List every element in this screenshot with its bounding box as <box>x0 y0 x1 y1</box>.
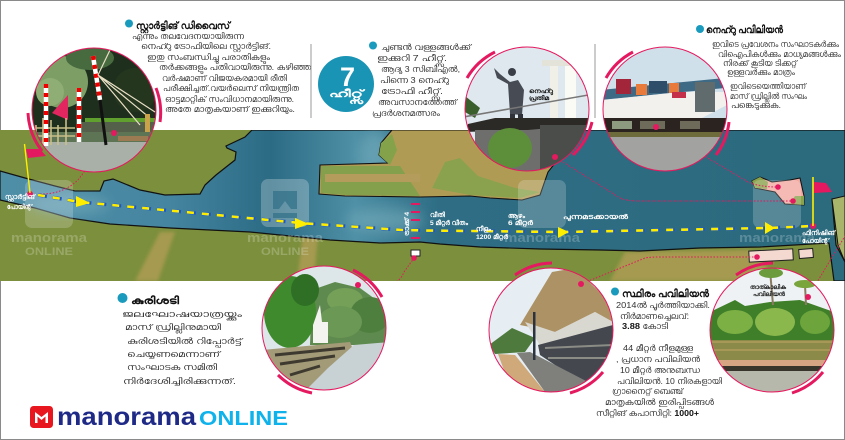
map labels <box>5 193 836 246</box>
text block: starting device: പരീക്ഷിച്ചത്.വയർലെസ് നിയന്ത്രിത <box>163 83 300 93</box>
text block: Nehru pavilion: നിരക്ക് കൂടിയ ടിക്കറ്റ് <box>723 58 798 69</box>
text block: Nehru pavilion <box>696 23 841 111</box>
text block: starting device: അതേ മാതൃകയാണ് ഇക്കുറിയും. <box>165 104 295 115</box>
text block: Kurishadi: കുരിശടി <box>131 294 180 307</box>
watermarks: manorama <box>11 230 88 245</box>
text block: heats <box>369 42 472 118</box>
photo: starting device <box>28 46 161 174</box>
connector dots <box>27 184 816 261</box>
watermarks: ONLINE <box>25 246 73 258</box>
photo: Nehru statue: പ്രതിമ <box>529 95 549 102</box>
text block: starting device: സ്റ്റാർട്ടിങ് ഡിവൈസ് <box>136 19 232 34</box>
text block: heats: അവസാനത്തേത്ത് <box>378 97 458 107</box>
text block: heats: ആദ്യ 3 സിബിഎൽ, <box>381 64 460 75</box>
badge: 7 heats: 7 <box>340 62 355 92</box>
photo: Kurishadi <box>262 266 390 393</box>
text block: permanent pavilion: , പ്രധാന പവിലിയൻ <box>616 354 701 364</box>
logo: manorama online: ONLINE <box>199 408 288 430</box>
text block: permanent pavilion: 10 മീറ്റർ അനുബന്ധ <box>620 365 701 376</box>
map labels: പോയിന്റ് <box>802 237 830 246</box>
text block: Kurishadi <box>118 293 244 386</box>
text block: permanent pavilion: സ്ഥിരം പവിലിയൻ <box>622 287 710 300</box>
watermarks: ONLINE <box>261 246 309 258</box>
text block: permanent pavilion: മാതൃകയിൽ ഇരിപ്പിടങ്ങൾ <box>605 397 716 408</box>
pavilion blocks on the bank <box>411 248 813 262</box>
map labels: സ്റ്റാർട്ടിങ് <box>5 193 36 202</box>
text block: heats: പിന്നെ 3 നെഹ്റു <box>380 75 449 86</box>
race route <box>38 195 813 232</box>
text block: permanent pavilion: ഗ്രാനൈറ്റ് ബെഞ്ച് <box>612 386 684 397</box>
badge: 7 heats <box>318 56 374 112</box>
watermarks <box>11 179 816 258</box>
map labels: 6 മീറ്റർ <box>508 219 534 228</box>
text block: permanent pavilion: 44 മീറ്റർ നീളമുള്ള <box>623 343 694 354</box>
badge: 7 heats: ഹീറ്റ്സ് <box>329 87 366 104</box>
text block: starting device: നെഹ്റു ട്രോഫിയിലെ സ്റ്റാർട്ടിങ്. <box>141 41 271 53</box>
text block: Nehru pavilion: പങ്കെടുക്കുക. <box>731 100 781 111</box>
finish flag <box>813 177 832 226</box>
text block: permanent pavilion: 3.88 കോടി <box>622 321 668 331</box>
text block: Kurishadi: കുരിശടിയിൽ റിപ്പോർട്ട് <box>127 336 244 347</box>
route arrows <box>76 196 775 238</box>
map labels: ട്രാക്ക് 4 <box>404 212 411 236</box>
text block: Nehru pavilion: വിഐപികൾക്കും മാധ്യമങ്ങൾക്കും <box>718 49 841 60</box>
text block: Kurishadi: ചെയ്യണമെന്നാണ് <box>127 349 222 359</box>
start flag <box>24 144 46 193</box>
dividers <box>311 44 595 118</box>
photo: permanent pavilion <box>489 263 613 395</box>
logo: manorama online <box>30 403 288 431</box>
river <box>0 130 845 281</box>
text block: permanent pavilion: പവിലിയൻ. 10 നിരകളായി <box>617 376 722 386</box>
photo: Nehru pavilion <box>600 47 730 173</box>
map labels: വീതി <box>430 211 446 219</box>
text block: heats: ഇക്കുറി 7 ഹീറ്റ്സ്. <box>377 53 447 66</box>
text block: starting device: തർക്കങ്ങളും പതിവായിരുന്നു. കഴിഞ്ഞ <box>159 62 313 74</box>
map labels: പോയിന്റ് <box>7 203 33 212</box>
photo: temporary pavilion: പവിലിയൻ <box>753 291 786 298</box>
text block: Nehru pavilion: മാസ് ഡ്രില്ലിൽ സംഘം <box>730 91 807 102</box>
dotted connector lines <box>38 156 845 281</box>
text block: Nehru pavilion: ഉള്ളവർക്കും മാത്രം <box>727 67 795 77</box>
photo: temporary pavilion: താത്കാലിക <box>750 284 786 291</box>
text block: permanent pavilion <box>596 287 722 419</box>
watermarks: manorama <box>739 230 816 245</box>
text block: Kurishadi: മാസ് ഡ്രില്ലിനുമായി <box>125 322 221 333</box>
text block: permanent pavilion: 2014ൽ പൂർത്തിയാക്കി. <box>616 300 710 311</box>
text block: Kurishadi: സംഘാടക സമിതി <box>127 362 217 372</box>
map labels: 1200 മീറ്റർ <box>476 233 508 242</box>
text block: permanent pavilion: സീറ്റിങ് കപാസിറ്റി: 1000+ <box>596 408 699 419</box>
text block: Kurishadi: ജലഘോഷയാത്രയ്ക്കും <box>122 309 243 320</box>
map labels: ഫിനിഷിങ് <box>802 229 836 237</box>
map labels: ആഴം <box>508 213 525 220</box>
photo: Nehru statue <box>461 47 592 175</box>
text block: starting device: ഇതു സംബന്ധിച്ചു പരാതികളും <box>147 52 270 64</box>
text block: heats: ട്രോഫി ഹീറ്റ്സ്. <box>381 86 443 99</box>
island: Nehru pavilion <box>752 177 804 205</box>
upper middle land <box>319 130 566 200</box>
text block: heats: ചുണ്ടൻ വള്ളങ്ങൾക്ക് <box>381 42 472 53</box>
text block: Nehru pavilion: നെഹ്റു പവിലിയൻ <box>706 23 784 37</box>
map labels: പുന്നമടക്കായൽ <box>563 213 629 222</box>
text block: starting device: വർഷമാണ് വിജയകരമായി രീതി <box>162 73 287 83</box>
text block: Nehru pavilion: ഇവിടെയെത്തിയാണ് <box>730 81 807 91</box>
right land <box>832 196 845 262</box>
text block: Kurishadi: നിർദേശിച്ചിരിക്കുന്നത്. <box>123 376 236 386</box>
text block: permanent pavilion: നിർമാണച്ചെലവ്: <box>620 311 689 321</box>
watermarks: manorama <box>504 230 581 245</box>
logo: manorama online: manorama <box>57 403 197 431</box>
photo: Nehru statue: നെഹ്റു <box>529 88 554 95</box>
map labels: 5 മീറ്റർ വീതം <box>430 219 468 228</box>
map labels: നീളം <box>476 225 491 233</box>
text block: starting device: എന്നും തലവേദനയായിരുന്ന <box>132 31 245 42</box>
finish gate <box>411 203 420 239</box>
photo: temporary pavilion <box>710 263 835 394</box>
watermarks: manorama <box>247 230 324 245</box>
text block: heats: പ്രദർശനമത്സരം <box>372 108 440 118</box>
text block: starting device: ഓട്ടമാറ്റിക് സംവിധാനമായിരുന്നു. <box>165 94 294 105</box>
text block: starting device <box>125 19 313 115</box>
map band <box>0 130 845 281</box>
